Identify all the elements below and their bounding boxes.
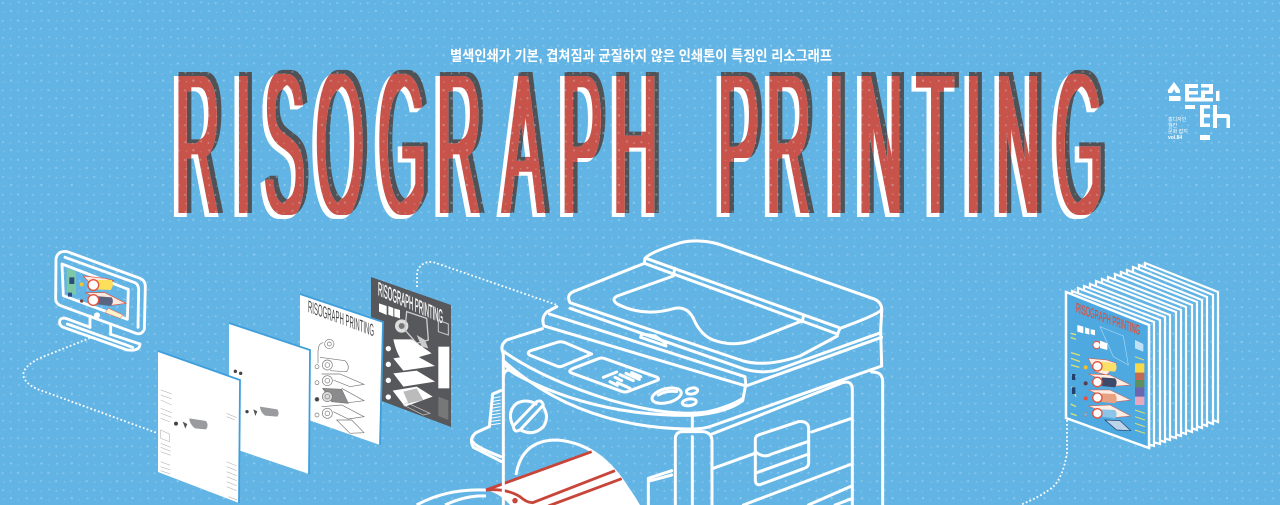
- logo text: vol.84: [1168, 135, 1182, 141]
- logo: [1168, 82, 1230, 141]
- sheet: front plate: [158, 351, 240, 503]
- dotted connector lines: [23, 262, 1067, 505]
- logo text: 문화 잡지: [1168, 128, 1188, 135]
- printer body outline: [472, 241, 883, 505]
- sheet: black plate: [371, 277, 451, 427]
- lid: [645, 241, 882, 330]
- drum: [417, 440, 640, 505]
- side dial: [510, 401, 547, 433]
- logo text: [1168, 116, 1188, 141]
- text: RISOGRAPH PRINTING: [308, 297, 374, 340]
- paper tray: [489, 391, 501, 427]
- monitor icon: [56, 251, 145, 350]
- printer: [417, 241, 883, 505]
- text: RISOGRAPH PRINTING: [378, 279, 443, 328]
- logo text: 월간: [1168, 122, 1178, 129]
- scanner deck: [570, 308, 881, 372]
- monitor screen artwork: [67, 268, 126, 318]
- sheet: middle plate: [229, 323, 310, 474]
- front poster: [1066, 292, 1149, 448]
- subtitle: 별색인쇄가 기본, 겹쳐짐과 균질하지 않은 인쇄톤이 특징인 리소그래프: [450, 48, 832, 65]
- title: RISOGRAPH PRINTING: [172, 33, 1102, 262]
- sheet: outline plate: [300, 294, 383, 445]
- control panel: [502, 329, 745, 415]
- logo text: 홍디자인: [1168, 116, 1187, 123]
- body: [499, 361, 508, 505]
- text: RISOGRAPH PRINTING: [1076, 299, 1140, 338]
- stacked printed posters: [1066, 263, 1218, 448]
